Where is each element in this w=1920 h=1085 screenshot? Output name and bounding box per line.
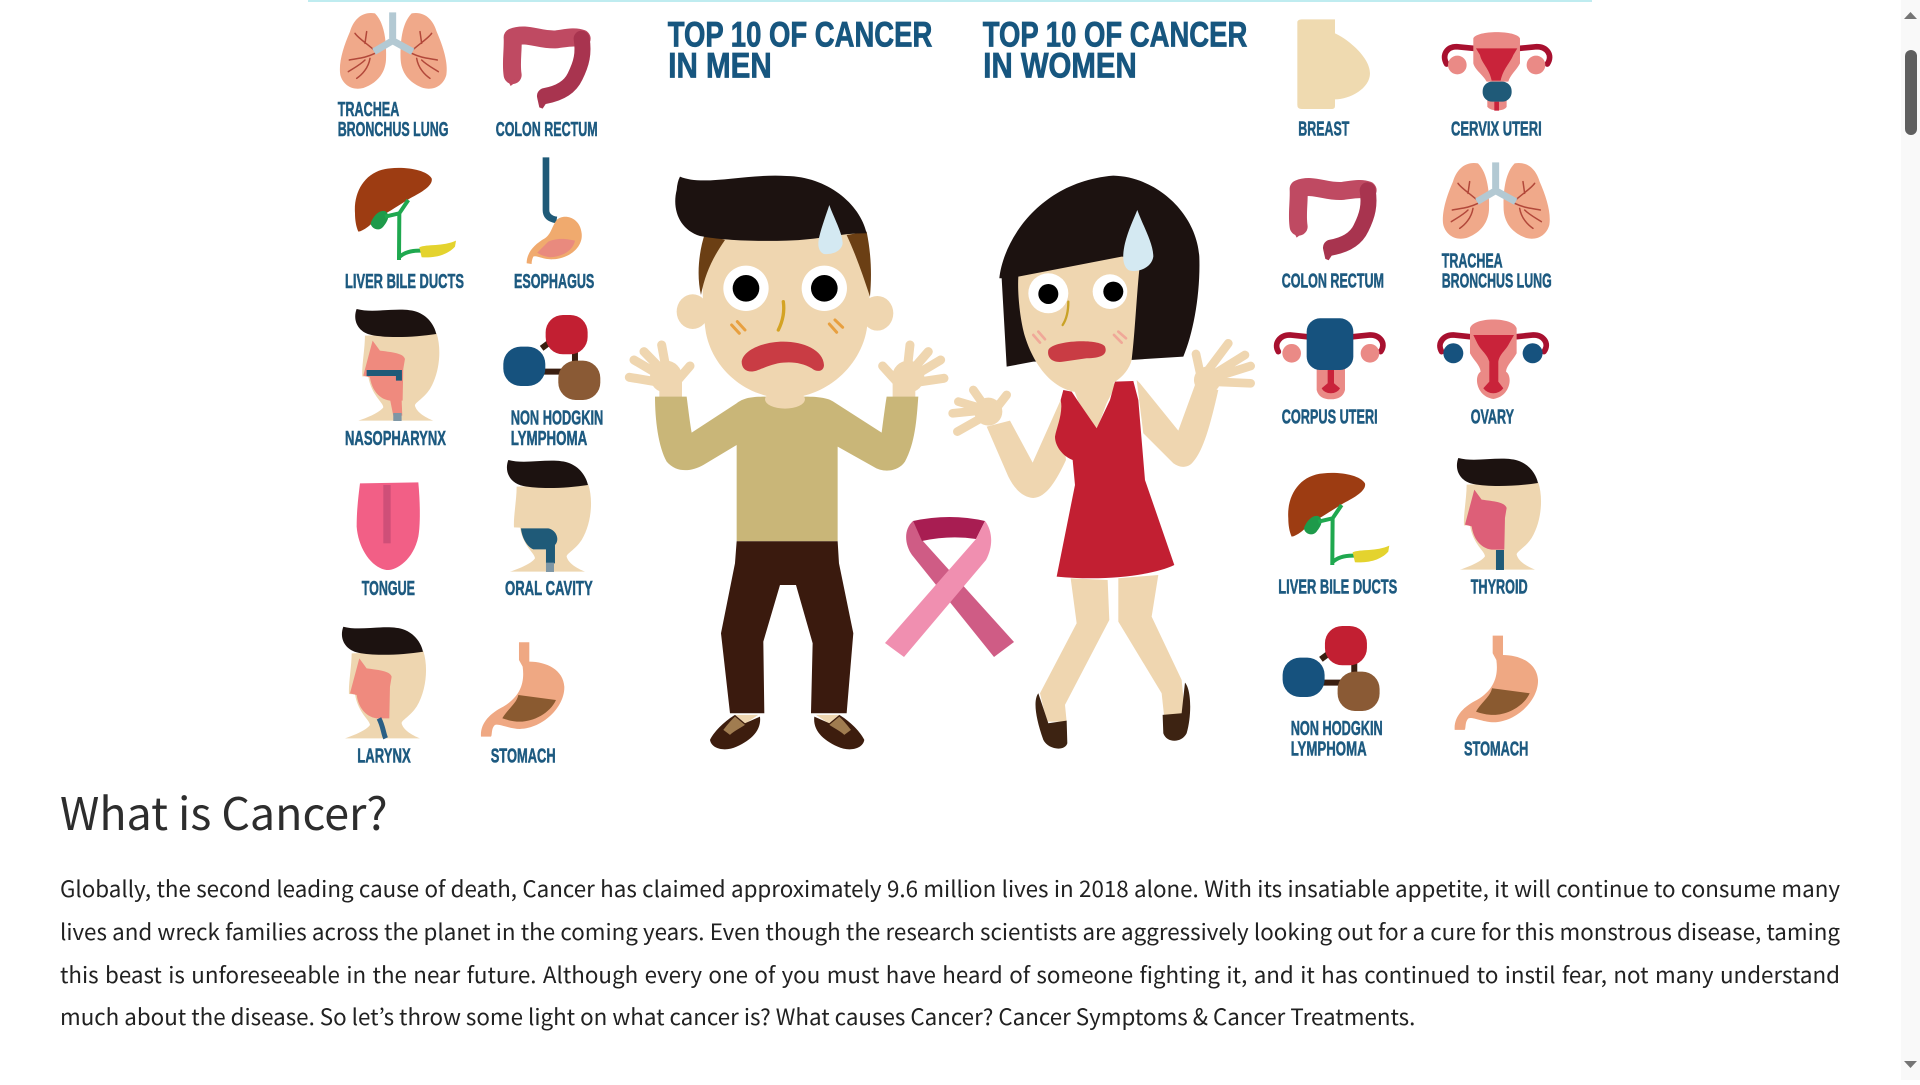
icon: stomach (women): STOMACH bbox=[1464, 738, 1528, 761]
icon: lungs (women): BRONCHUS LUNG bbox=[1442, 269, 1552, 292]
icon: liver bile ducts (men): LIVER BILE DUCTS bbox=[345, 270, 464, 293]
icon: oral cavity: ORAL CAVITY bbox=[505, 577, 593, 600]
top border line bbox=[308, 0, 1592, 2]
icon: tongue: TONGUE bbox=[362, 577, 415, 600]
body paragraph: this beast is unforeseeable in the near future. Although every one of you must have heard of someone fighting it, and it has continued to instil fear, not many understand bbox=[60, 958, 1840, 990]
woman: head bbox=[999, 176, 1199, 392]
woman: red dress bbox=[1055, 381, 1174, 578]
icon: lungs (women): TRACHEA bbox=[1442, 250, 1503, 273]
icon: liver bile ducts (men) bbox=[345, 168, 464, 293]
man: head bbox=[675, 176, 893, 409]
man: hands bbox=[629, 345, 944, 398]
heading: what is cancer: What is Cancer? bbox=[60, 778, 388, 843]
body paragraph bbox=[60, 872, 1840, 1032]
icon: lungs (men) bbox=[338, 12, 448, 141]
icon: oral cavity bbox=[505, 460, 593, 600]
icon: esophagus bbox=[514, 157, 594, 293]
heading: top 10 of cancer in men: TOP 10 OF CANCER bbox=[668, 16, 932, 55]
icon: breast: BREAST bbox=[1298, 118, 1350, 141]
heading: top 10 of cancer in women bbox=[983, 16, 1247, 86]
icon: stomach (men): STOMACH bbox=[491, 744, 556, 767]
woman: shoes bbox=[1036, 683, 1190, 749]
icon: corpus uteri bbox=[1277, 318, 1383, 428]
body paragraph: Globally, the second leading cause of death, Cancer has claimed approximately 9.6 million lives in 2018 alone. With its insatiable appetite, it will continue to consume many bbox=[60, 872, 1840, 904]
icon: colon rectum (men) bbox=[496, 35, 598, 141]
browser scrollbar bbox=[1901, 0, 1920, 1080]
icon: tongue bbox=[357, 482, 420, 600]
icon: corpus uteri: CORPUS UTERI bbox=[1282, 405, 1378, 428]
character: worried woman bbox=[953, 176, 1251, 749]
icon: non hodgkin lymphoma (women) bbox=[1283, 626, 1383, 761]
icon: ovary: OVARY bbox=[1471, 405, 1514, 428]
man: sweater bbox=[655, 397, 918, 541]
woman: hands bbox=[953, 343, 1251, 432]
character: worried man bbox=[629, 176, 944, 749]
icon: non hodgkin lymphoma (men): LYMPHOMA bbox=[511, 427, 587, 450]
heading: top 10 of cancer in men: IN MEN bbox=[668, 47, 772, 86]
body paragraph: much about the disease. So let’s throw some light on what cancer is? What causes Cancer? Cancer Symptoms & Cancer Treatments. bbox=[60, 1000, 1415, 1032]
icon: stomach (men) bbox=[481, 642, 564, 767]
icon: colon rectum (women) bbox=[1282, 187, 1384, 292]
heading: top 10 of cancer in men bbox=[668, 16, 932, 86]
icon: thyroid: THYROID bbox=[1471, 575, 1528, 598]
icon: larynx bbox=[342, 627, 426, 767]
heading: top 10 of cancer in women: TOP 10 OF CANCER bbox=[983, 16, 1247, 55]
icon: pink awareness ribbon bbox=[885, 517, 1014, 657]
icon: breast bbox=[1297, 19, 1370, 141]
icon: cervix uteri: CERVIX UTERI bbox=[1451, 118, 1542, 141]
icon: liver bile ducts (women): LIVER BILE DUCTS bbox=[1278, 575, 1397, 598]
icon: stomach (women) bbox=[1455, 636, 1538, 761]
icon: non hodgkin lymphoma (women): LYMPHOMA bbox=[1291, 738, 1367, 761]
icon: larynx: LARYNX bbox=[357, 744, 411, 767]
icon: lungs (men): BRONCHUS LUNG bbox=[338, 118, 448, 141]
man: shoes bbox=[710, 715, 864, 749]
icon: esophagus: ESOPHAGUS bbox=[514, 270, 594, 293]
icon: nasopharynx bbox=[345, 309, 446, 450]
icon: non hodgkin lymphoma (men): NON HODGKIN bbox=[511, 406, 603, 429]
man: trousers bbox=[721, 541, 853, 713]
icon: ovary bbox=[1440, 320, 1546, 428]
heading: top 10 of cancer in women: IN WOMEN bbox=[983, 47, 1137, 86]
icon: colon rectum (men): COLON RECTUM bbox=[496, 118, 598, 141]
icon: non hodgkin lymphoma (men) bbox=[503, 315, 603, 450]
woman: arms, neck and legs bbox=[987, 380, 1218, 722]
icon: non hodgkin lymphoma (women): NON HODGKIN bbox=[1291, 717, 1383, 740]
icon: liver bile ducts (women) bbox=[1278, 473, 1397, 598]
icon: thyroid bbox=[1457, 458, 1541, 598]
icon: cervix uteri bbox=[1445, 32, 1550, 141]
icon: colon rectum (women): COLON RECTUM bbox=[1282, 269, 1384, 292]
icon: lungs (men): TRACHEA bbox=[338, 98, 399, 121]
infographic: top 10 cancers in men and women bbox=[308, 0, 1592, 767]
icon: lungs (women) bbox=[1442, 162, 1552, 292]
body paragraph: lives and wreck families across the planet in the coming years. Even though the research scientists are aggressively looking out for a cure for this monstrous disease, taming bbox=[60, 915, 1840, 947]
icon: nasopharynx: NASOPHARYNX bbox=[345, 427, 446, 450]
